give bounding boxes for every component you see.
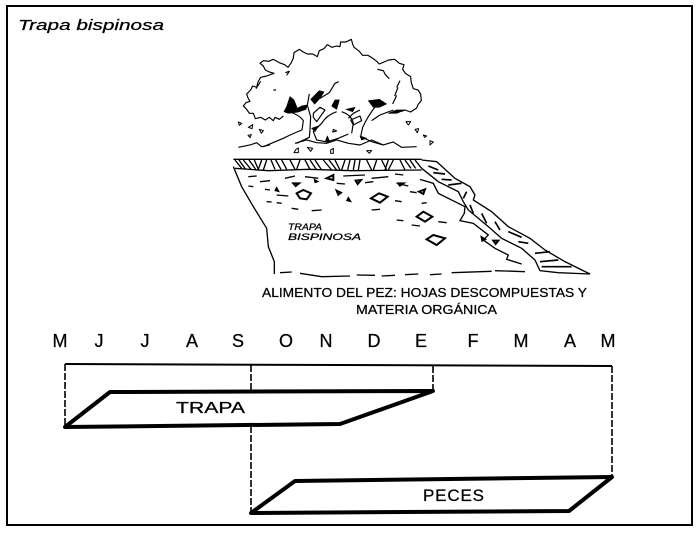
month axis: E xyxy=(415,331,427,351)
sediment dashes and leaves xyxy=(248,174,447,226)
month axis: D xyxy=(368,331,380,351)
caption: ALIMENTO DEL PEZ: HOJAS DESCOMPUESTAS Y xyxy=(262,285,587,300)
caption: MATERIA ORGÁNICA xyxy=(356,302,497,317)
illustration: pond bank xyxy=(233,159,590,277)
canopy inner branches xyxy=(256,69,400,104)
month axis: M xyxy=(600,331,616,351)
TRAPA period bar xyxy=(65,391,433,427)
month axis xyxy=(52,331,616,351)
inner shore line xyxy=(420,179,522,264)
month axis: M xyxy=(52,331,68,351)
pond left edge xyxy=(233,167,274,274)
month axis: O xyxy=(279,331,293,351)
title: Trapa bispinosa xyxy=(18,17,164,34)
PECES period bar xyxy=(251,477,612,513)
TRAPA period bar: TRAPA xyxy=(176,400,245,417)
caption xyxy=(262,285,587,317)
dark foliage patches xyxy=(284,91,405,142)
month axis: A xyxy=(186,331,198,351)
month axis: M xyxy=(514,331,528,351)
month axis: J xyxy=(94,331,104,351)
tree canopy outline xyxy=(243,39,421,121)
month axis: S xyxy=(232,331,244,351)
pond label second line: BISPINOSA xyxy=(288,232,361,242)
month axis: J xyxy=(140,331,150,351)
falling leaves xyxy=(238,122,433,153)
pond bottom line xyxy=(280,271,525,277)
hatched top soil band xyxy=(233,159,422,171)
pond label: TRAPA xyxy=(288,222,322,232)
tree trunks xyxy=(263,94,393,147)
illustration: tree xyxy=(238,39,433,153)
PECES period bar: PECES xyxy=(423,486,484,505)
month axis: A xyxy=(564,331,576,351)
ground line xyxy=(238,140,417,147)
period guide lines xyxy=(65,364,612,512)
right embankment xyxy=(422,160,590,274)
month axis: F xyxy=(468,331,478,351)
month axis: N xyxy=(320,331,332,351)
